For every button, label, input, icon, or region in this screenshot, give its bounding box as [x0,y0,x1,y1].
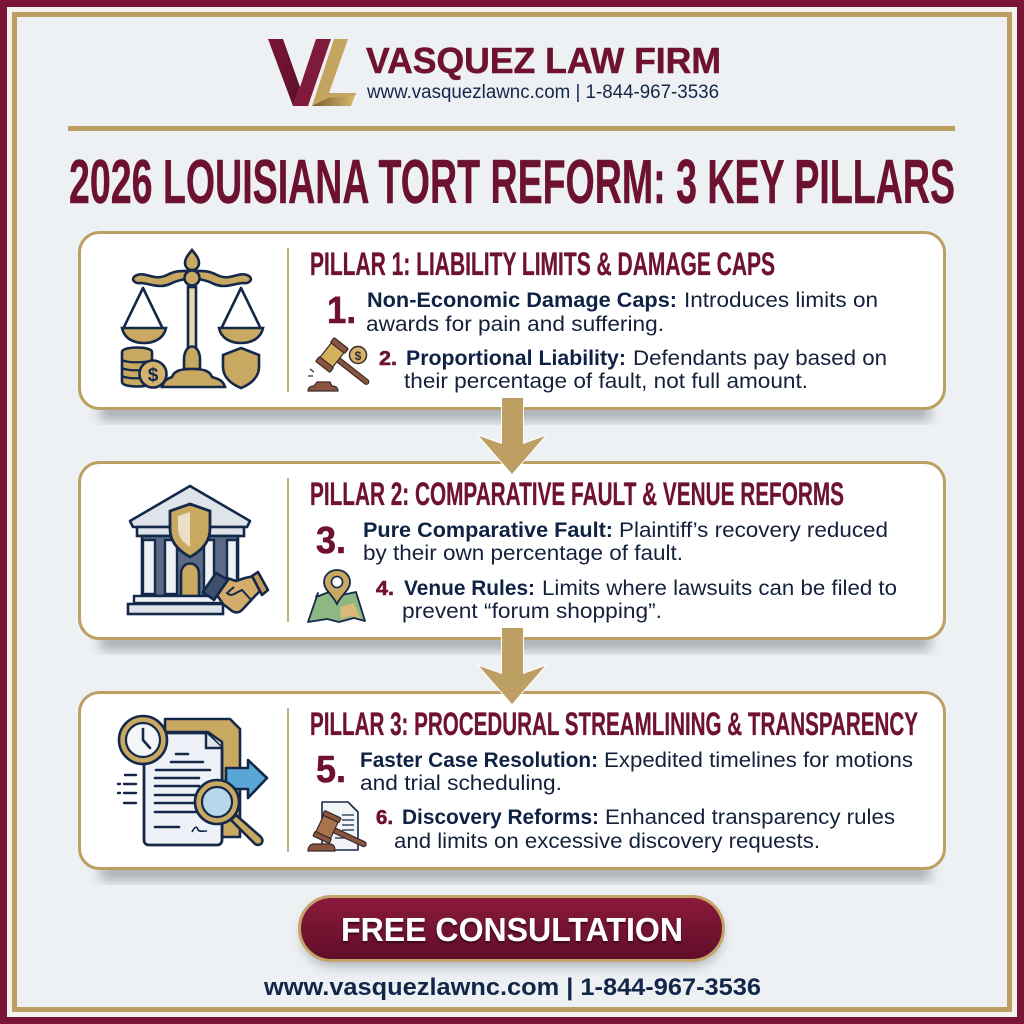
item 6 text [394,806,895,853]
item 1 text: awards for pain and suffering. [366,313,664,336]
item 5 text: and trial scheduling. [360,772,562,795]
item 5 text [360,749,913,795]
button: free consultation [300,896,724,966]
icon: scales of justice [122,250,263,388]
panel: pillar 1 [80,232,944,420]
item 1 text [366,289,878,336]
item 4 number: 4. [376,578,394,600]
icon: document with clock and magnifier [118,716,267,845]
item 6 text: Enhanced transparency rules [605,806,895,829]
item 6 text: and limits on excessive discovery requests. [394,830,820,853]
item 1 number: 1. [327,290,356,332]
firm name: VASQUEZ LAW FIRM [366,40,721,81]
icon: map pin [308,570,365,622]
item 4 text: prevent “forum shopping”. [402,600,662,623]
icon: scales of justice: $ [148,365,159,386]
logo mark [268,39,356,106]
heading: pillar 1: PILLAR 1: LIABILITY LIMITS & DAMAGE CAPS [310,246,775,282]
arrow: pillar 1 to pillar 2 [479,398,545,474]
arrow: pillar 2 to pillar 3 [479,628,545,704]
icon: gavel with coin [308,338,377,395]
item 2 text: their percentage of fault, not full amount. [404,370,808,393]
item 4 text: Limits where lawsuits can be filed to [542,577,897,600]
item 5 number: 5. [316,749,346,791]
item 3 text: by their own percentage of fault. [363,542,683,565]
item 3 text: Pure Comparative Fault: [363,519,613,542]
item 6 text: Discovery Reforms: [402,806,599,829]
footer contact line: www.vasquezlawnc.com | 1-844-967-3536 [263,974,761,1001]
icon: gavel with document [308,802,372,858]
item 3 text: Plaintiff’s recovery reduced [619,519,888,542]
item 6 number: 6. [376,807,393,829]
item 4 text: Venue Rules: [404,577,535,600]
item 5 text: Expedited timelines for motions [604,749,913,772]
item 2 text [404,347,887,393]
item 1 text: Non-Economic Damage Caps: [367,289,677,312]
item 4 text [402,577,897,623]
item 5 text: Faster Case Resolution: [360,749,598,772]
icon: courthouse with shield and handshake [128,486,268,614]
firm contact line: www.vasquezlawnc.com | 1-844-967-3536 [366,82,719,103]
button: free consultation: FREE CONSULTATION [341,911,683,948]
item 3 text [363,519,888,565]
icon: gavel with coin: $ [355,349,362,363]
item 3 number: 3. [316,520,346,562]
panel: pillar 2 [80,462,944,650]
item 1 text: Introduces limits on [684,289,878,312]
item 2 text: Proportional Liability: [406,347,626,370]
item 2 text: Defendants pay based on [633,347,887,370]
panel: pillar 3 [80,692,944,880]
item 2 number: 2. [379,348,397,370]
